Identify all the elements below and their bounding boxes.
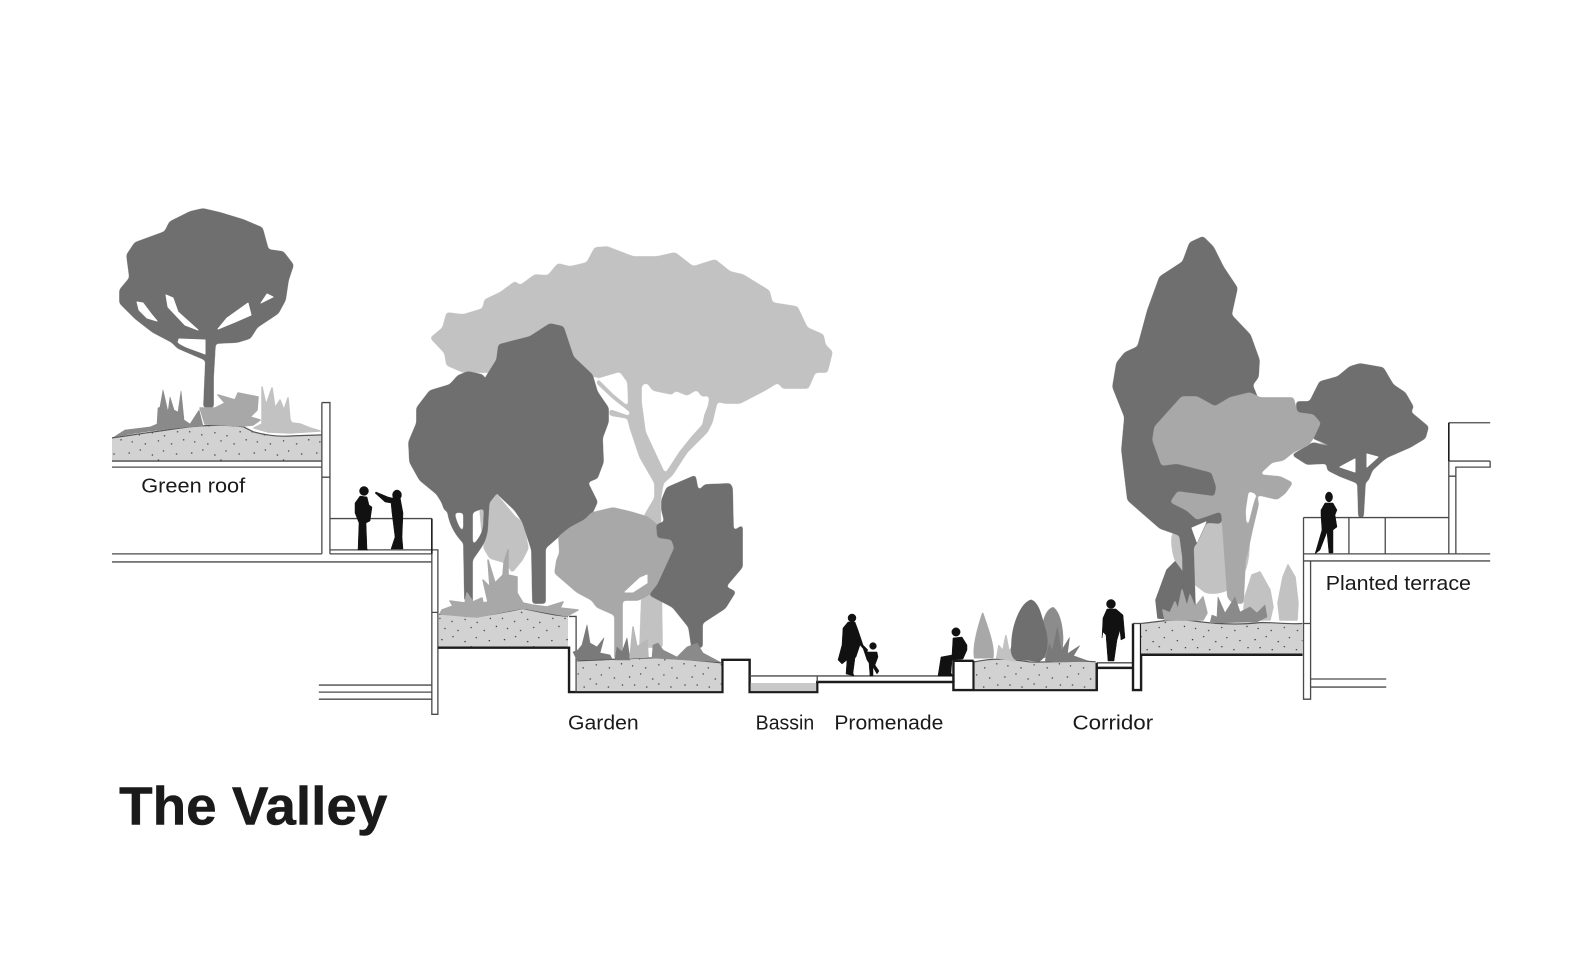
structure: section lines: [112, 403, 1490, 714]
tree: garden tall dark tree: [485, 324, 608, 603]
tree: large light umbrella pine: [431, 247, 832, 647]
planter soil second step: [439, 608, 568, 648]
person: sitting on bench: [938, 628, 967, 676]
tree: garden medium grey tree: [555, 508, 677, 660]
people: adult and child on promenade: [838, 614, 879, 676]
tree: garden front dark tree: [650, 476, 742, 647]
title: The Valley: The Valley: [119, 777, 388, 836]
green roof soil: [112, 425, 322, 461]
bassin water: [751, 683, 816, 691]
plants: central planter shrubs: [974, 600, 1088, 662]
plants: garden planting: [573, 625, 720, 662]
people: couple talking on balcony: [355, 486, 403, 550]
label: Planted terrace: Planted terrace: [1326, 572, 1471, 595]
plants: right planter shrubs and grasses: [1156, 562, 1298, 623]
person: standing on terrace: [1315, 492, 1337, 554]
garden soil: [577, 658, 721, 691]
seat block and planter: [953, 661, 974, 690]
label: Garden: Garden: [568, 711, 639, 734]
right planter soil: [1141, 620, 1303, 654]
plants: green roof planting: [114, 387, 320, 437]
label: Bassin: Bassin: [756, 711, 814, 734]
tree: planted terrace dark tree: [1293, 364, 1428, 517]
person: standing on corridor: [1102, 599, 1125, 661]
label: Green roof: Green roof: [141, 474, 245, 497]
label: Corridor: Corridor: [1072, 711, 1153, 734]
terrace structure: [1304, 423, 1490, 699]
tree: garden left dark tree: [409, 372, 505, 603]
tree: corridor tall dark tree: [1113, 237, 1259, 610]
label: Promenade: Promenade: [834, 711, 943, 734]
plants: second step planting: [440, 550, 578, 617]
tree: green roof tree: [120, 209, 293, 407]
tree: corridor medium grey pine: [1153, 393, 1320, 603]
tree: corridor light background tree: [1172, 505, 1249, 593]
